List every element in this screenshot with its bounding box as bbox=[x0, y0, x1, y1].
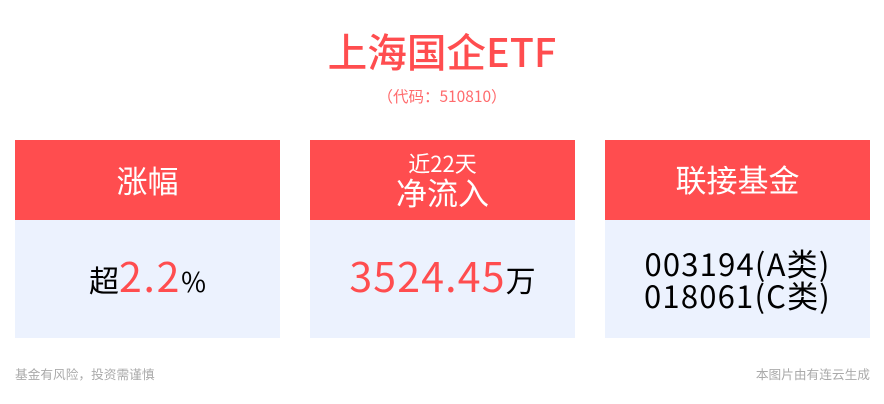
panel: rise bbox=[15, 140, 280, 338]
source note: 本图片由有连云生成 bbox=[756, 364, 870, 383]
panel value: linked funds: 018061(C类) bbox=[644, 272, 831, 317]
panel value: rise: 超2.2% bbox=[89, 244, 206, 304]
panel heading: net inflow: 近22天 bbox=[408, 147, 477, 179]
panel: linked funds bbox=[605, 140, 870, 338]
panel heading: net inflow bbox=[310, 140, 575, 220]
panel value: net inflow: 3524.45万 bbox=[349, 244, 536, 304]
subtitle: fund code: （代码：510810） bbox=[377, 85, 507, 107]
panel heading: net inflow: 净流入 bbox=[396, 169, 489, 214]
panel heading: linked funds bbox=[605, 140, 870, 220]
title: 上海国企ETF bbox=[328, 22, 556, 79]
panel heading: linked funds: 联接基金 bbox=[676, 156, 800, 201]
panel value: rise bbox=[15, 220, 280, 338]
panel heading: rise bbox=[15, 140, 280, 220]
panel heading: rise: 涨幅 bbox=[116, 157, 178, 202]
risk disclaimer: 基金有风险，投资需谨慎 bbox=[15, 364, 155, 383]
panel value: net inflow bbox=[310, 220, 575, 338]
panel value: linked funds: 003194(A类) bbox=[644, 240, 831, 285]
panel: net inflow bbox=[310, 140, 575, 338]
panel value: linked funds bbox=[605, 220, 870, 338]
